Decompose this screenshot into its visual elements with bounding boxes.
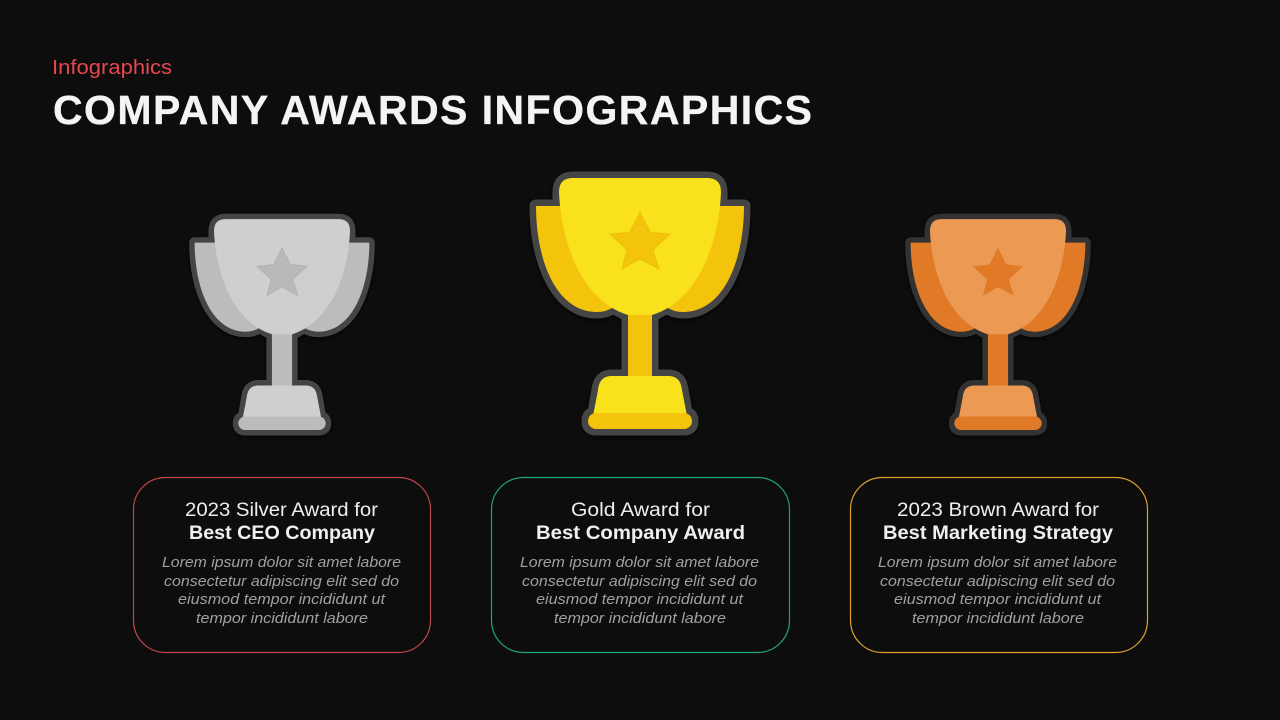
silver award description: eiusmod tempor incididunt ut [178, 592, 386, 608]
silver award heading [185, 500, 379, 544]
bronze award description: Lorem ipsum dolor sit amet labore [878, 555, 1117, 571]
silver award description [162, 555, 401, 627]
panel: gold award [492, 478, 790, 652]
panel: silver award [134, 478, 430, 652]
icon: silver trophy [195, 219, 369, 430]
gold award heading [536, 500, 745, 544]
gold award description: tempor incididunt labore [554, 611, 726, 627]
bronze award heading: 2023 Brown Award for [897, 500, 1100, 521]
eyebrow label: Infographics [52, 57, 172, 79]
gold award heading: Best Company Award [536, 523, 745, 544]
title: COMPANY AWARDS INFOGRAPHICS [53, 87, 812, 133]
icon: bronze trophy [911, 219, 1085, 430]
silver award description: tempor incididunt labore [196, 611, 368, 627]
bronze award heading [883, 500, 1113, 544]
gold award description [520, 555, 759, 627]
bronze award description [878, 555, 1117, 627]
bronze award heading: Best Marketing Strategy [883, 523, 1113, 544]
gold award description: consectetur adipiscing elit sed do [522, 574, 757, 590]
silver award description: Lorem ipsum dolor sit amet labore [162, 555, 401, 571]
silver award heading: Best CEO Company [189, 523, 375, 544]
panel: bronze award [850, 478, 1148, 652]
bronze award description: tempor incididunt labore [912, 611, 1084, 627]
gold award heading: Gold Award for [571, 500, 711, 521]
gold award description: eiusmod tempor incididunt ut [536, 592, 744, 608]
bronze award description: eiusmod tempor incididunt ut [894, 592, 1102, 608]
bronze award description: consectetur adipiscing elit sed do [880, 574, 1115, 590]
gold award description: Lorem ipsum dolor sit amet labore [520, 555, 759, 571]
icon: gold trophy [536, 178, 744, 429]
silver award heading: 2023 Silver Award for [185, 500, 379, 521]
silver award description: consectetur adipiscing elit sed do [164, 574, 399, 590]
